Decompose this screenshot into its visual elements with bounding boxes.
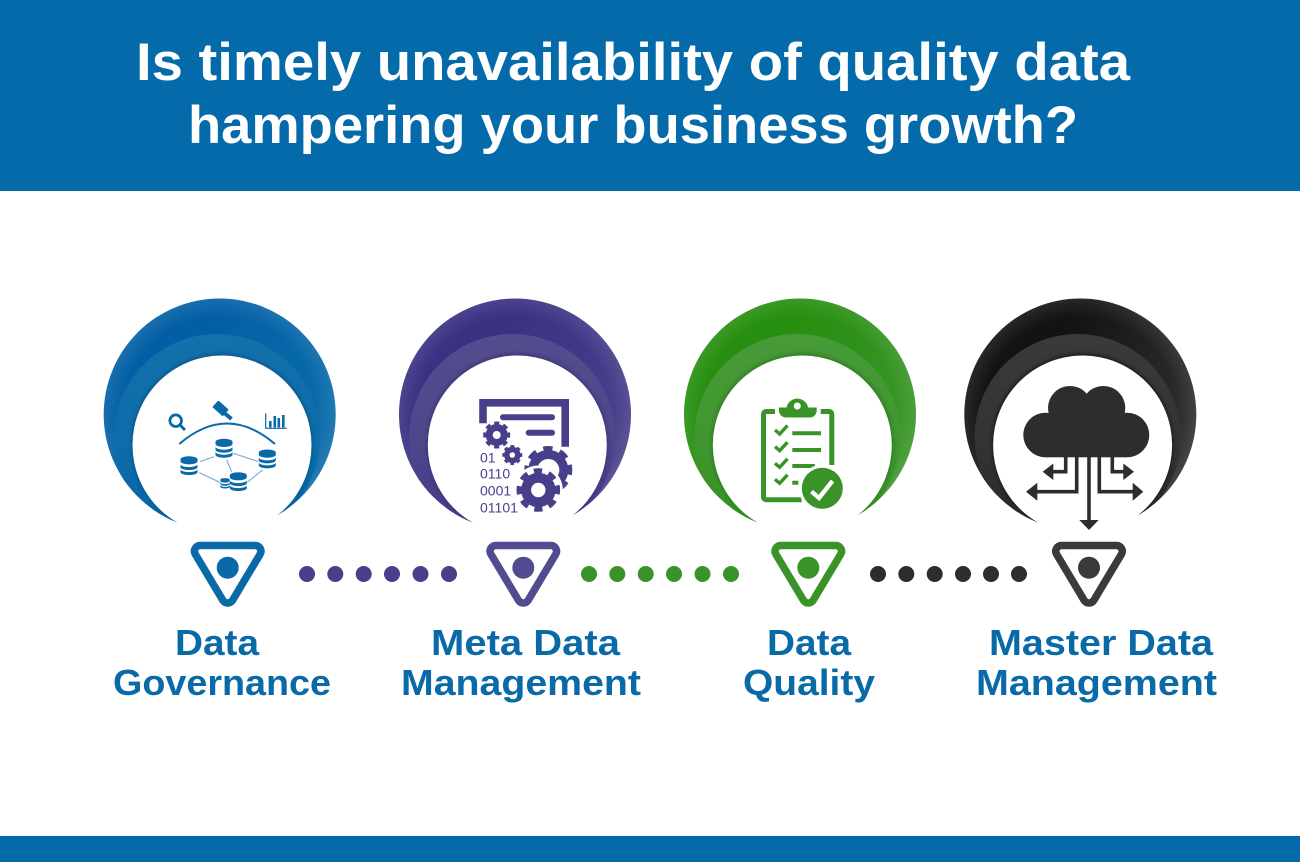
icon: magnifier (170, 415, 185, 430)
icon: cloud with arrows (1023, 386, 1149, 530)
crescent: Data Governance (104, 298, 336, 540)
check badge (799, 465, 846, 512)
header banner (0, 0, 1300, 191)
clipboard outline (764, 412, 832, 500)
crescent: Meta Data Management (399, 298, 631, 540)
gear small 1 (485, 424, 508, 446)
label: Data Quality: Quality (743, 662, 875, 703)
label: Meta Data Management: Meta Data (431, 622, 621, 663)
clipboard clip (779, 399, 817, 418)
label: Data Quality: Data (767, 622, 852, 663)
label: Master Data Management: Master Data (989, 622, 1214, 663)
gear back (527, 448, 570, 492)
network links (199, 453, 263, 482)
checklist lines (792, 433, 821, 483)
cloud (1023, 386, 1149, 457)
gear large (519, 471, 558, 509)
icon: data governance network (170, 400, 287, 491)
binary digits: 0001 (480, 483, 511, 499)
label: Data Quality (743, 622, 875, 703)
document frame (483, 403, 565, 447)
marker: Data Quality (775, 545, 842, 603)
icon: clipboard checklist (764, 399, 846, 512)
binary digits: 0110 (480, 466, 510, 482)
document lines (503, 417, 552, 433)
icon: metadata document with gears (480, 403, 570, 515)
databases (180, 439, 276, 491)
arrows (1026, 457, 1143, 530)
marker: Meta Data Management (490, 545, 557, 603)
label: Master Data Management: Management (976, 662, 1217, 703)
arc (179, 424, 275, 444)
title: hampering your business growth? (188, 96, 1078, 155)
icon: bar chart (266, 413, 287, 428)
gear small 2 (504, 446, 521, 464)
label: Master Data Management (976, 622, 1217, 703)
title: Is timely unavailability of quality data (136, 33, 1131, 92)
dotted connector: dark (870, 566, 1027, 582)
icon: gavel (212, 400, 232, 419)
label: Meta Data Management: Management (401, 662, 641, 703)
binary digits: 01 (480, 450, 496, 466)
label: Data Governance: Data (175, 622, 260, 663)
dotted connector: green (581, 566, 739, 582)
label: Data Governance: Governance (113, 662, 331, 703)
crescent: Data Quality (684, 298, 916, 540)
marker: Master Data Management (1056, 545, 1122, 603)
crescent: Master Data Management (964, 298, 1196, 540)
dotted connector: purple (299, 566, 457, 582)
label: Meta Data Management (401, 622, 641, 703)
footer bar (0, 836, 1300, 862)
checklist marks (775, 426, 788, 483)
title (136, 33, 1131, 155)
marker: Data Governance (194, 545, 261, 603)
binary digits (480, 450, 518, 515)
binary digits: 01101 (480, 499, 518, 515)
label: Data Governance (113, 622, 331, 703)
